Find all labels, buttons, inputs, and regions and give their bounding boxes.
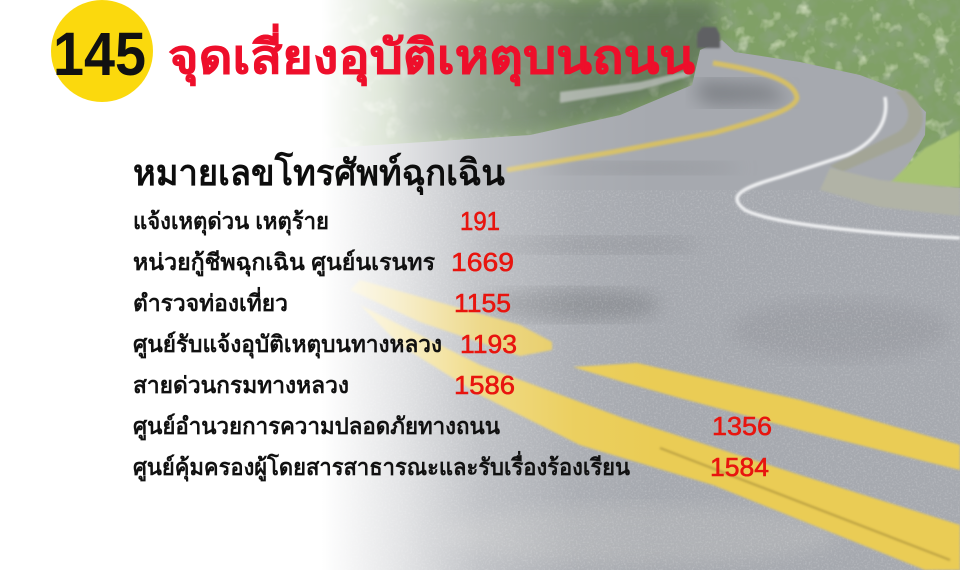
road shadow <box>695 80 790 106</box>
guardrail <box>560 70 690 103</box>
yellow circle <box>51 0 153 102</box>
row: 1586: 1586 <box>454 370 515 400</box>
yellow band: upper right <box>573 363 960 470</box>
row: 1669: 1669 <box>451 247 514 277</box>
lower concrete curb <box>820 168 960 216</box>
row: 1584: ศูนย์คุ้มครองผู้โดยสารสาธารณะและรับเรื่องร้องเรียน <box>133 450 630 482</box>
badge: 145 <box>51 0 153 102</box>
upper concrete curb <box>830 90 923 172</box>
row: 1356: ศูนย์อำนวยการความปลอดภัยทางถนน <box>133 413 500 441</box>
row: 1584 <box>133 450 769 482</box>
row: 1669 <box>133 247 514 277</box>
row: 1193: 1193 <box>460 329 517 359</box>
yellow centre line <box>507 63 797 170</box>
heading: emergency numbers: หมายเลขโทรศัพท์ฉุกเฉิน <box>133 151 505 196</box>
roadside vegetation <box>350 0 960 188</box>
car <box>697 27 720 48</box>
row: 1155: ตำรวจท่องเที่ยว <box>133 286 288 316</box>
row: 1356: 1356 <box>712 411 772 441</box>
badge number: 145 <box>53 20 146 88</box>
yellow band: left <box>350 280 552 356</box>
row: 1669: หน่วยกู้ชีพฉุกเฉิน ศูนย์นเรนทร <box>133 249 436 277</box>
yellow band: lower <box>360 305 960 570</box>
row: 1155: 1155 <box>454 288 511 318</box>
background photo: winding road <box>335 0 960 570</box>
bright grass <box>888 130 960 188</box>
road grain <box>0 190 960 570</box>
row: 1586: สายด่วนกรมทางหลวง <box>133 372 349 398</box>
white edge line <box>737 97 960 238</box>
list of emergency numbers <box>133 206 772 482</box>
title: จุดเสี่ยงอุบัติเหตุบนถนน <box>168 23 695 86</box>
row: 1356 <box>133 411 772 441</box>
row: 191: 191 <box>460 206 500 236</box>
row: 1193: ศูนย์รับแจ้งอุบัติเหตุบนทางหลวง <box>133 331 442 359</box>
row: 1584: 1584 <box>710 452 769 482</box>
row: 191 <box>133 206 500 236</box>
row: 1586 <box>133 370 515 400</box>
row: 191: แจ้งเหตุด่วน เหตุร้าย <box>133 208 329 236</box>
row: 1155 <box>133 286 511 318</box>
